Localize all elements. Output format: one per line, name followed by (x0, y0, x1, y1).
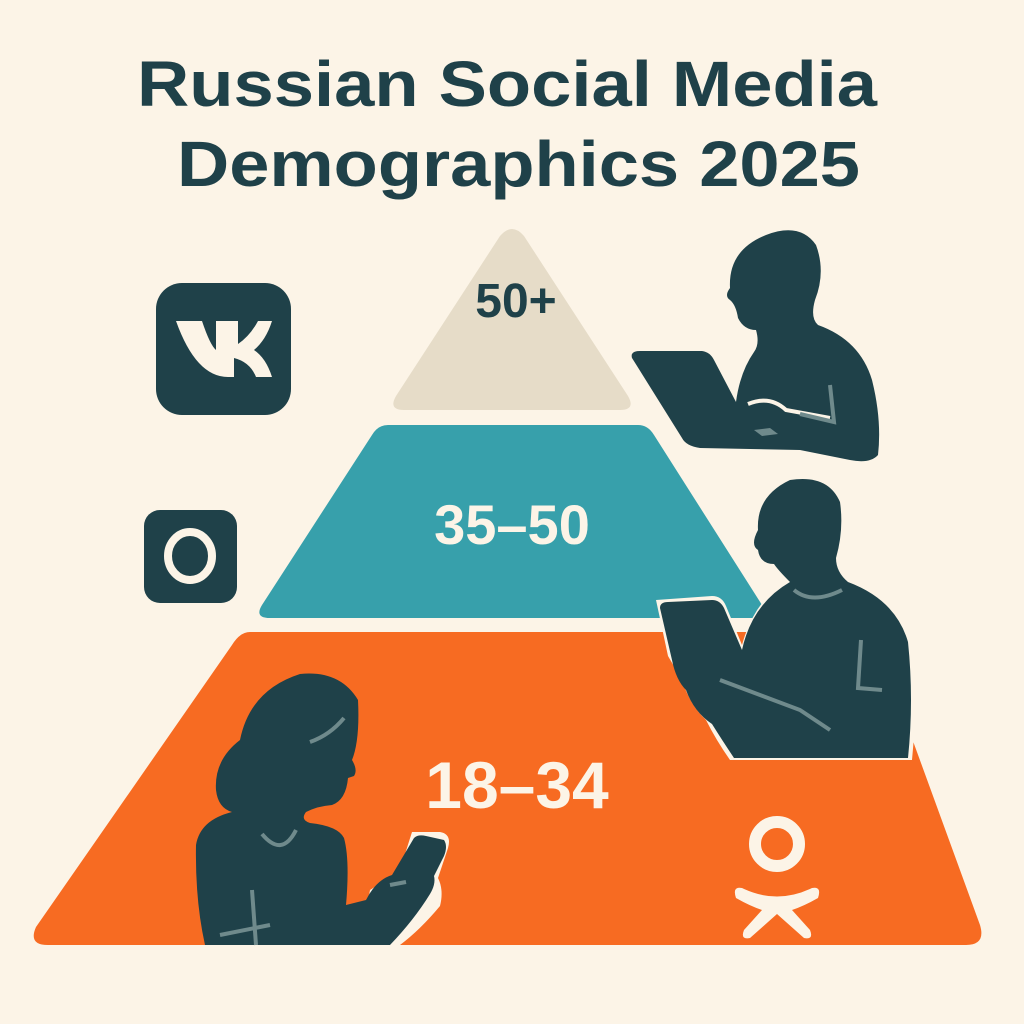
person: woman with phone (196, 674, 449, 945)
tier: 50+ (393, 229, 631, 410)
tier: 18-34 (34, 632, 981, 945)
icon: OK logo (735, 822, 819, 938)
title (137, 48, 877, 200)
tier: 18-34: 18–34 (425, 748, 609, 822)
tier: 50+: 50+ (475, 275, 557, 328)
icon: VK (156, 283, 291, 415)
icon: O (144, 510, 237, 603)
title: Russian Social Media (137, 48, 877, 120)
person: man with tablet (656, 476, 915, 760)
tier: 35-50 (259, 425, 764, 618)
person: man with laptop (632, 230, 879, 461)
title: Demographics 2025 (177, 128, 860, 200)
tier: 35-50: 35–50 (434, 493, 590, 556)
